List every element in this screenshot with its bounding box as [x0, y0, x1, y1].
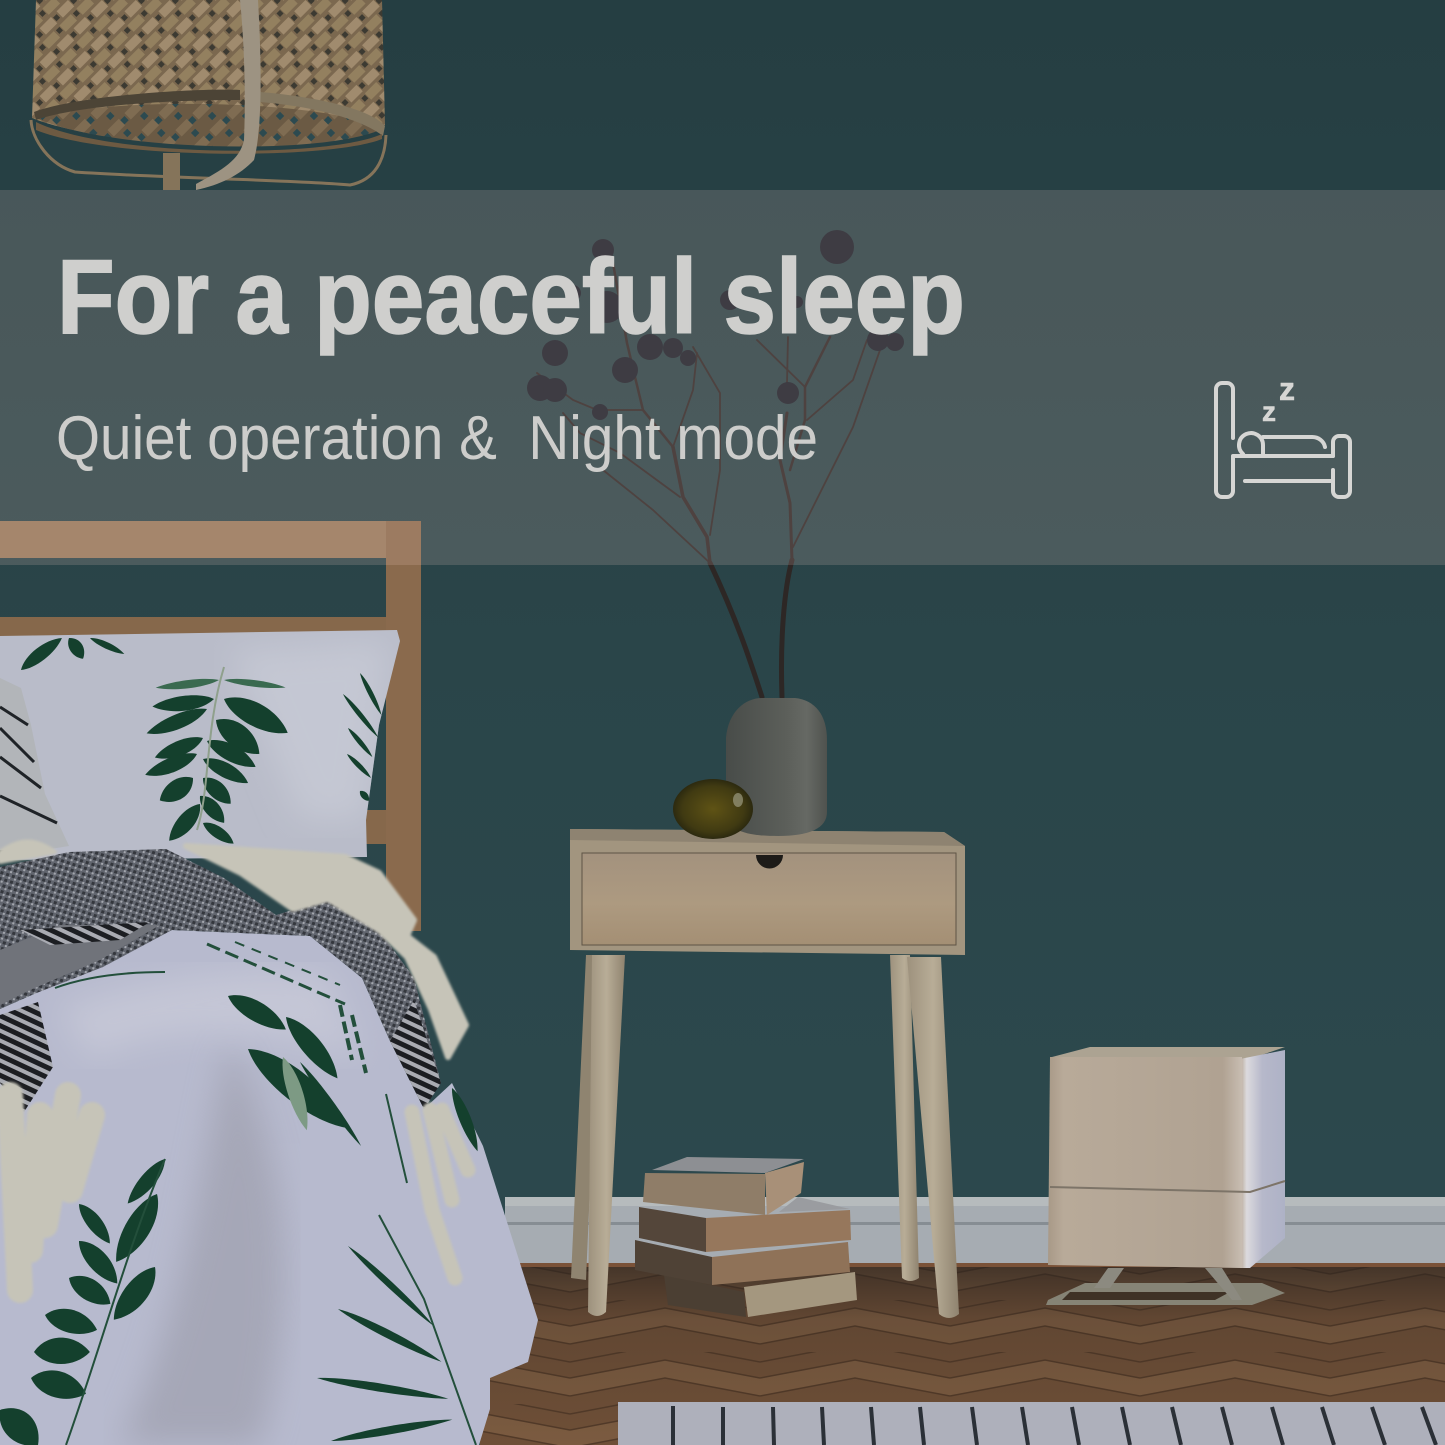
grey knitted blanket: [0, 849, 441, 1112]
humidifier on metal stand: [1046, 1047, 1285, 1305]
icon: sleeping person in bed: z: [1262, 396, 1276, 427]
striped rug: [618, 1402, 1445, 1445]
grey vase: [726, 698, 827, 836]
bedside table: [570, 829, 965, 1318]
bed headboard: [0, 521, 421, 931]
wooden herringbone floor: [480, 1263, 1445, 1445]
striped cushion: [0, 678, 69, 857]
baseboard: [505, 1197, 1445, 1265]
amber glass ball: [673, 779, 753, 839]
thistle seed heads: [527, 230, 904, 420]
dried thistle branches: [537, 263, 880, 697]
title: For a peaceful sleep: [57, 238, 965, 356]
subtitle: Quiet operation & Night mode: [56, 404, 818, 473]
white fringe of throw: [0, 842, 468, 1290]
pillow with leaf print: [0, 630, 400, 860]
stack of books: [635, 1157, 857, 1317]
icon: sleeping person in bed: z: [1279, 371, 1295, 407]
hanging woven lamp: [31, 0, 386, 190]
white duvet with leaf print: [0, 930, 538, 1445]
translucent header band: [0, 190, 1445, 565]
icon: sleeping person in bed: [1216, 371, 1350, 497]
